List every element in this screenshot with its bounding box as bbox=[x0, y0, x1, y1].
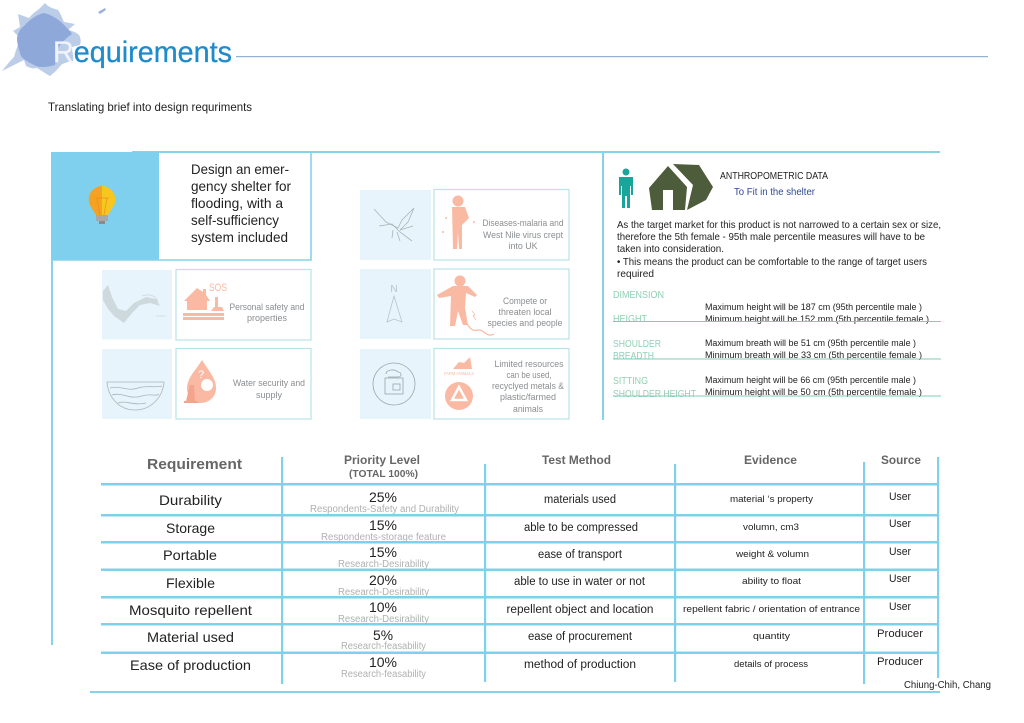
card: personal safety bbox=[102, 270, 311, 340]
icon: farm animals and recycling: FARM ANIMALS bbox=[444, 371, 474, 376]
anthropometric subheading: To Fit in the shelter bbox=[734, 187, 816, 198]
table headers: Source bbox=[881, 453, 921, 467]
label: Limited resources bbox=[494, 359, 564, 370]
column: evidence bbox=[683, 494, 860, 670]
dimensions table: Minimum height will be 152 mm (5th percentile female ) bbox=[705, 314, 929, 324]
label bbox=[488, 296, 562, 329]
column: test method bbox=[506, 494, 654, 671]
column: evidence: quantity bbox=[753, 631, 790, 642]
panel: anthropometric data bbox=[613, 164, 941, 400]
dimensions table: Maximum height will be 187 cm (95th percentile male ) bbox=[705, 302, 922, 312]
icon: farm animals and recycling bbox=[444, 357, 474, 410]
column: evidence: details of process bbox=[734, 659, 808, 670]
label bbox=[233, 378, 305, 401]
column: requirement names: Storage bbox=[166, 520, 215, 536]
icon: person bbox=[619, 168, 633, 208]
panel: frame lines bbox=[51, 151, 940, 693]
card: water security bbox=[102, 348, 311, 419]
column: priority sources: Research-feasability bbox=[341, 669, 426, 680]
label bbox=[492, 359, 565, 415]
icon: person and snake bbox=[437, 276, 494, 335]
header rule bbox=[236, 56, 988, 57]
anthropometric paragraph: • This means the product can be comfortable to the range of target users bbox=[617, 256, 927, 268]
label: threaten local bbox=[498, 307, 552, 318]
column: source bbox=[877, 491, 923, 668]
column: priority sources bbox=[310, 504, 459, 680]
dimensions table: DIMENSION bbox=[613, 290, 664, 301]
column: evidence: repellent fabric / orientation of entrance bbox=[683, 604, 860, 615]
label: animals bbox=[513, 404, 543, 415]
column: test method: ease of procurement bbox=[528, 631, 633, 643]
anthropometric paragraph: As the target market for this product is not narrowed to a certain sex or size, bbox=[617, 219, 941, 231]
column: priority percentages: 10% bbox=[369, 599, 397, 615]
card: invasive species bbox=[360, 269, 569, 339]
column: evidence: material ‘s property bbox=[730, 494, 813, 505]
label: species and people bbox=[488, 318, 562, 329]
label: can be used, bbox=[506, 370, 552, 381]
column: requirement names: Material used bbox=[147, 629, 234, 645]
icon: flooded house and SOS: SOS bbox=[209, 282, 227, 294]
column: test method: able to be compressed bbox=[524, 522, 638, 534]
icon: north arrow: N bbox=[390, 284, 398, 295]
brief text: self-sufficiency bbox=[191, 212, 279, 228]
table headers: Priority Level bbox=[344, 453, 420, 467]
brief text: Design an emer- bbox=[191, 161, 289, 177]
icon: flooded house and SOS bbox=[183, 282, 227, 320]
column: requirement names bbox=[129, 492, 252, 673]
dimensions table: Minimum height will be 50 cm (5th percentile female ) bbox=[705, 387, 922, 397]
header bbox=[2, 3, 988, 114]
column: requirement names: Portable bbox=[163, 547, 217, 563]
column: evidence: ability to float bbox=[742, 576, 801, 587]
dimensions table: HEIGHT bbox=[613, 314, 647, 325]
column: priority percentages: 10% bbox=[369, 654, 397, 670]
anthropometric paragraph: therefore the 5th female - 95th male percentile measures will have to be bbox=[617, 231, 925, 243]
label: Compete or bbox=[503, 296, 547, 307]
column: test method: able to use in water or not bbox=[514, 576, 646, 588]
column: requirement names: Durability bbox=[159, 492, 222, 508]
table headers: Test Method bbox=[542, 453, 611, 467]
label: Diseases-malaria and bbox=[482, 218, 564, 229]
column: test method: method of production bbox=[524, 659, 636, 671]
column: priority percentages: 15% bbox=[369, 517, 397, 533]
column: priority sources: Research-Desirability bbox=[338, 614, 429, 625]
label bbox=[482, 218, 564, 252]
column: priority percentages bbox=[369, 489, 397, 670]
column: test method: materials used bbox=[544, 494, 616, 506]
dimensions table: SITTING bbox=[613, 376, 648, 387]
label: recyclyed metals & bbox=[492, 381, 565, 392]
requirements table bbox=[101, 453, 939, 684]
column: priority percentages: 20% bbox=[369, 572, 397, 588]
dimensions table: Minimum breath will be 33 cm (5th percentile female ) bbox=[705, 350, 922, 360]
column: source: User bbox=[889, 573, 911, 585]
icon: mosquito bbox=[374, 208, 414, 241]
column: requirement names: Ease of production bbox=[130, 657, 251, 673]
table headers bbox=[147, 453, 921, 480]
column: requirement names: Mosquito repellent bbox=[129, 602, 252, 618]
column: priority sources: Research-Desirability bbox=[338, 587, 429, 598]
dimensions table: SHOULDER bbox=[613, 339, 661, 350]
brief outline bbox=[53, 152, 311, 260]
table headers: Requirement bbox=[147, 456, 242, 473]
table headers: (TOTAL 100%) bbox=[349, 469, 418, 480]
label: supply bbox=[256, 390, 282, 401]
column: priority percentages: 5% bbox=[373, 627, 393, 643]
icon: water drop: ? bbox=[198, 369, 204, 381]
brief text: gency shelter for bbox=[191, 178, 291, 194]
column: evidence: weight & volumn bbox=[735, 549, 809, 560]
icon: paint splash bbox=[2, 3, 106, 76]
author credit: Chiung-Chih, Chang bbox=[904, 680, 991, 691]
label: Personal safety and bbox=[230, 302, 304, 313]
column: requirement names: Flexible bbox=[166, 575, 215, 591]
icon: cracked basin bbox=[107, 382, 164, 410]
dimensions table: SHOULDER HEIGHT bbox=[613, 389, 696, 400]
anthropometric paragraph: taken into consideration. bbox=[617, 243, 724, 255]
column: source: User bbox=[889, 546, 911, 558]
card: diseases bbox=[360, 190, 569, 260]
panel: design brief bbox=[51, 152, 311, 260]
column: priority percentages: 25% bbox=[369, 489, 397, 505]
column: source: User bbox=[889, 491, 911, 503]
dimensions table: Maximum breath will be 51 cm (95th percentile male ) bbox=[705, 338, 916, 348]
anthropometric paragraph: required bbox=[617, 268, 654, 280]
column: source: Producer bbox=[877, 628, 923, 640]
brief text bbox=[191, 161, 291, 245]
column: test method: ease of transport bbox=[538, 549, 623, 561]
brief blue block bbox=[51, 152, 159, 260]
subtitle: Translating brief into design requriments bbox=[48, 100, 252, 114]
icon: light bulb bbox=[89, 186, 115, 224]
table headers: Evidence bbox=[744, 453, 797, 467]
icon: factory in circle bbox=[373, 363, 415, 405]
icon: sick person bbox=[442, 196, 475, 249]
column: source: Producer bbox=[877, 656, 923, 668]
column: evidence: volumn, cm3 bbox=[743, 522, 799, 533]
label bbox=[230, 302, 304, 324]
anthropometric paragraph bbox=[617, 219, 941, 280]
icon: shelter bbox=[649, 164, 713, 210]
label: plastic/farmed bbox=[500, 392, 556, 403]
label: West Nile virus crept bbox=[483, 230, 563, 241]
column: priority sources: Respondents-storage feature bbox=[321, 532, 446, 543]
card: limited resources bbox=[360, 348, 569, 419]
column: priority sources: Research-Desirability bbox=[338, 559, 429, 570]
column: priority sources: Respondents-Safety and Durability bbox=[310, 504, 459, 515]
table grid bbox=[101, 457, 939, 684]
icon: flood wave bbox=[103, 285, 166, 323]
column: priority sources: Research-feasability bbox=[341, 641, 426, 652]
label: Water security and bbox=[233, 378, 305, 389]
column: source: User bbox=[889, 518, 911, 530]
column: test method: repellent object and location bbox=[506, 604, 654, 616]
column: source: User bbox=[889, 601, 911, 613]
brief text: flooding, with a bbox=[191, 195, 283, 211]
brief text: system included bbox=[191, 229, 288, 245]
icon: water drop bbox=[184, 360, 216, 403]
dimensions table: BREADTH bbox=[613, 351, 654, 362]
label: properties bbox=[247, 313, 287, 324]
label: into UK bbox=[508, 241, 538, 252]
column: priority percentages: 15% bbox=[369, 544, 397, 560]
dimensions table: Maximum height will be 66 cm (95th percentile male ) bbox=[705, 375, 916, 385]
icon: north arrow bbox=[387, 284, 402, 322]
dimensions table bbox=[613, 290, 941, 400]
anthropometric heading: ANTHROPOMETRIC DATA bbox=[720, 171, 828, 182]
title: Requirements bbox=[53, 36, 232, 69]
